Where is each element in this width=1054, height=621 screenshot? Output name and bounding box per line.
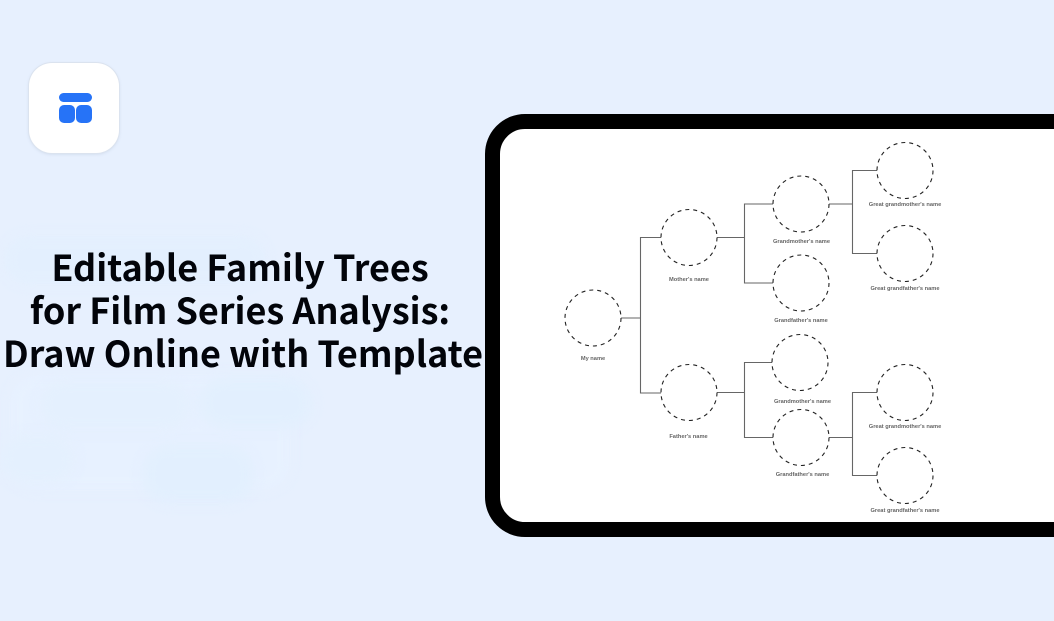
person: maternal grandmother [773,176,830,245]
person: me: My name [581,356,605,362]
person: father [661,364,717,440]
person: paternal grandmother [772,334,831,405]
person: maternal grandfather: Grandfather's name [774,318,828,324]
title: Editable Family Trees [51,240,429,292]
title: Draw Online with Template [3,326,483,378]
person: father: Father's name [669,434,708,440]
person: great grandfather 1 [870,226,940,292]
device frame [485,114,1054,537]
person: great grandmother 1: Great grandmother's name [869,202,941,208]
person: maternal grandfather [773,255,829,324]
title: for Film Series Analysis: [30,283,450,335]
person: paternal grandfather: Grandfather's name [776,472,829,478]
connector lines [621,170,877,476]
person: great grandfather 1: Great grandfather's name [870,286,940,292]
person: great grandmother 2 [869,364,941,430]
title [3,240,483,378]
person: mother: Mother's name [669,277,709,283]
person: great grandfather 2: Great grandfather's name [870,508,940,514]
person: great grandfather 2 [870,448,940,514]
icon: template glyph [59,93,92,123]
person: maternal grandmother: Grandmother's name [773,239,830,245]
person: great grandmother 1 [869,142,941,208]
person: paternal grandfather [773,410,829,478]
person: mother [661,210,717,283]
person: great grandmother 2: Great grandmother's name [869,424,941,430]
person: me [565,290,621,362]
person: paternal grandmother: Grandmother's name [774,399,831,405]
app icon [29,63,119,153]
background soft blobs [0,230,320,510]
